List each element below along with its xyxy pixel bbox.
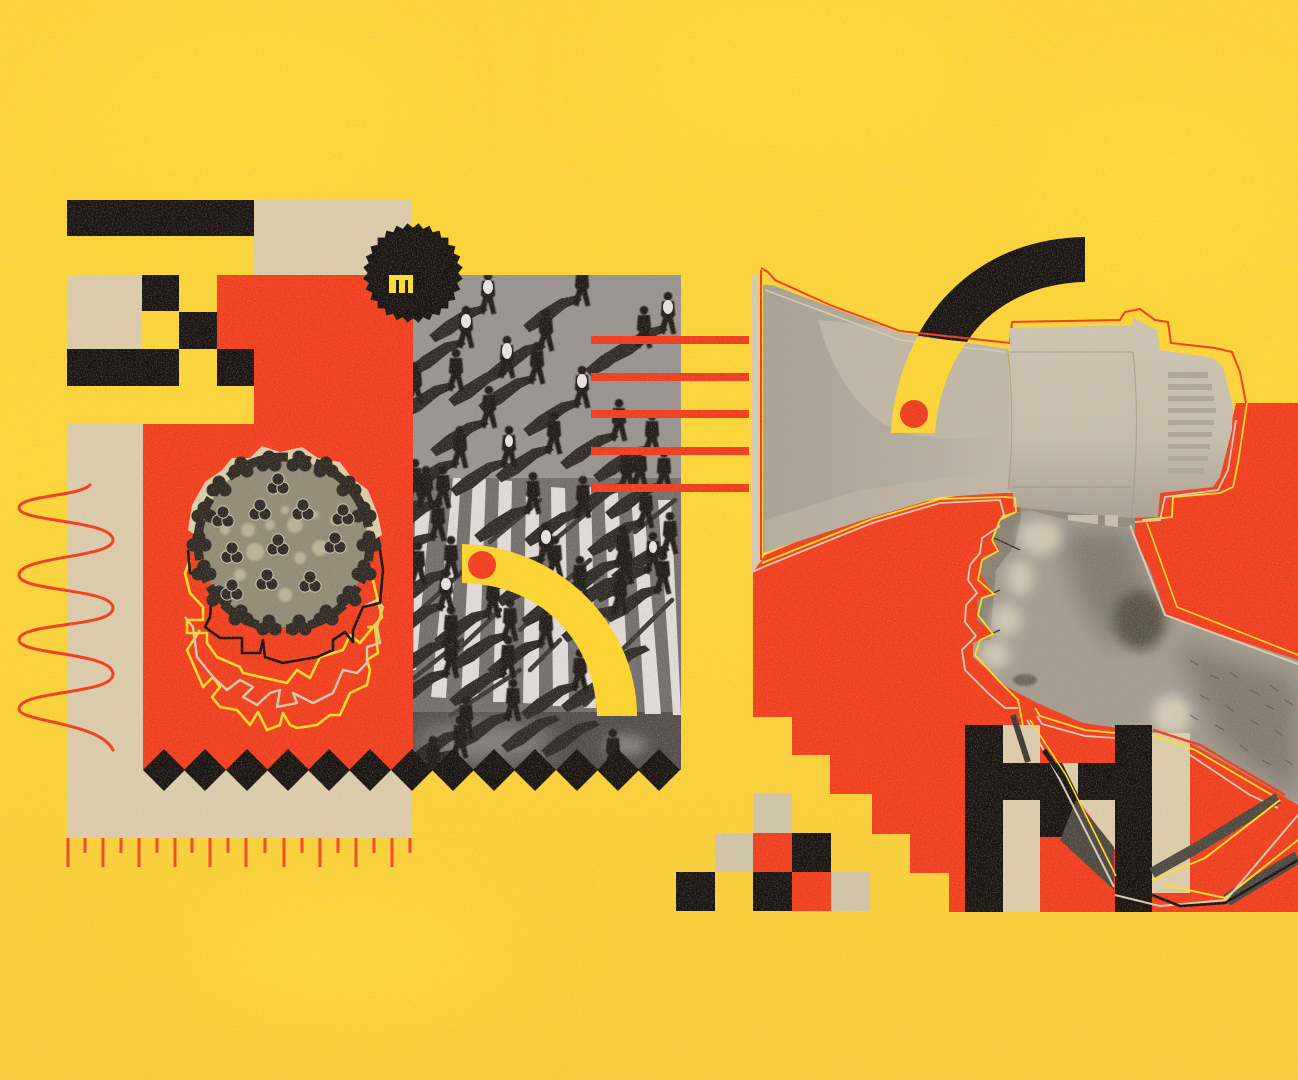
- outline set lower: [752, 403, 1247, 572]
- wrist highlight: [1152, 695, 1192, 735]
- body segment lines: [1008, 350, 1137, 518]
- horn top inner line: [765, 290, 1005, 352]
- black arc: [917, 237, 1085, 342]
- beige column and base: [67, 424, 411, 838]
- outline: black: [188, 537, 383, 663]
- lower glare: [765, 487, 998, 552]
- right outline yellow: [1142, 403, 1247, 520]
- beige columns: [1003, 725, 1190, 912]
- virus illustration: [185, 446, 383, 730]
- black and beige H block: [965, 703, 1298, 912]
- pavement bottom: [413, 712, 681, 772]
- beige wrist line: [1130, 525, 1298, 664]
- hand: [962, 510, 1298, 805]
- megaphone rim: [752, 274, 762, 572]
- yellow quarter arc with red dot: [462, 544, 637, 716]
- right outline beige: [1135, 420, 1236, 522]
- starburst: [363, 223, 463, 323]
- virus beige halo: [188, 446, 382, 560]
- hand outline left beige: [962, 526, 1018, 708]
- hand outline left yellow: [975, 512, 1028, 752]
- beige block upper left: [67, 275, 142, 349]
- pedestrian shadows: [413, 296, 670, 770]
- megaphone red outline top: [761, 268, 1246, 403]
- red lines from crowd to megaphone: [591, 336, 749, 492]
- neck: [1020, 500, 1135, 532]
- mesh right upper: [1152, 798, 1278, 873]
- virus perimeter spikes: [186, 450, 382, 636]
- virus light mottling: [220, 506, 340, 602]
- finger gaps: [992, 537, 1020, 633]
- beige block top: [254, 200, 411, 276]
- red staircase panel: [753, 403, 1298, 912]
- pixel triangle squares: [676, 794, 870, 911]
- knuckle highlights: [979, 519, 1062, 669]
- crosswalk stripes: [413, 478, 681, 715]
- hand base: [973, 510, 1298, 805]
- neck tabs: [1068, 515, 1118, 527]
- mesh left: [1013, 715, 1028, 762]
- cord yellow right: [1152, 800, 1298, 898]
- pavement: [413, 275, 681, 478]
- pedestrians dark: [405, 264, 678, 779]
- strap: mesh bands and cords: [1013, 715, 1298, 906]
- left panel: geometric block collage: [67, 200, 413, 838]
- forearm midtone: [1175, 640, 1298, 800]
- lower outline yellow: [762, 497, 1016, 563]
- thin yellow wrist line: [1147, 523, 1298, 655]
- bottom lighter patch: [415, 724, 555, 760]
- cord black bottom: [1152, 860, 1298, 906]
- megaphone: [752, 268, 1247, 572]
- outline: yellow outer: [187, 627, 378, 730]
- megaphone rim line: [760, 270, 762, 560]
- cord black: [1044, 750, 1078, 800]
- lower outline beige: [752, 500, 1004, 572]
- yellow lower: [1035, 708, 1272, 795]
- red lower: [1033, 703, 1285, 795]
- outline: yellow inner: [185, 560, 382, 683]
- black H: [965, 725, 1152, 912]
- mesh centre: [1060, 800, 1114, 890]
- wrist shadow: [1114, 590, 1166, 650]
- crowd photo: [413, 275, 681, 770]
- icon: logo mark: [389, 275, 413, 293]
- yellow strap shape: [891, 337, 967, 433]
- lower palm crease: [1013, 674, 1037, 686]
- badge: black starburst with logo: [363, 223, 463, 323]
- arm outlines lower: [1033, 703, 1285, 808]
- pedestrian light shirts: [441, 280, 673, 590]
- yellow arc: [462, 544, 637, 716]
- mesh right lower: [1227, 857, 1298, 900]
- virus body: [200, 459, 368, 627]
- red panel: [143, 275, 413, 770]
- crosswalk diagonal shadows: [414, 500, 675, 716]
- grille: [1168, 372, 1216, 474]
- bottom light spot: [603, 735, 647, 755]
- outline: beige: [185, 600, 383, 707]
- wave line: [19, 485, 113, 750]
- red squares: [753, 833, 831, 911]
- cord yellow left: [1030, 720, 1116, 876]
- lighter bell highlight: [818, 320, 1010, 439]
- black squares: [676, 833, 831, 911]
- pavement dark crossing base: [413, 478, 681, 718]
- virus dark rim: [198, 457, 370, 629]
- ruler ticks: [68, 838, 410, 867]
- beige squares: [715, 794, 870, 911]
- hand shading: [970, 512, 1298, 800]
- megaphone rear body: [1008, 318, 1233, 518]
- red dot on strap: [900, 400, 928, 428]
- cord beige bottom: [1115, 815, 1298, 906]
- black bar top: [67, 200, 254, 236]
- arm hair: [1190, 660, 1293, 765]
- beige lower: [1037, 716, 1278, 808]
- back of hand midtone: [1060, 530, 1150, 650]
- virus inner spike clusters: [212, 473, 354, 600]
- diamond row: [143, 749, 680, 791]
- fingers dark band: [977, 512, 1022, 640]
- cord beige: [1027, 720, 1114, 887]
- horn cone: [763, 285, 1013, 553]
- horn inner shading: [765, 320, 1010, 553]
- arm outlines upper: [1130, 523, 1298, 664]
- red dot: [468, 551, 496, 579]
- black pixel squares: [67, 275, 254, 386]
